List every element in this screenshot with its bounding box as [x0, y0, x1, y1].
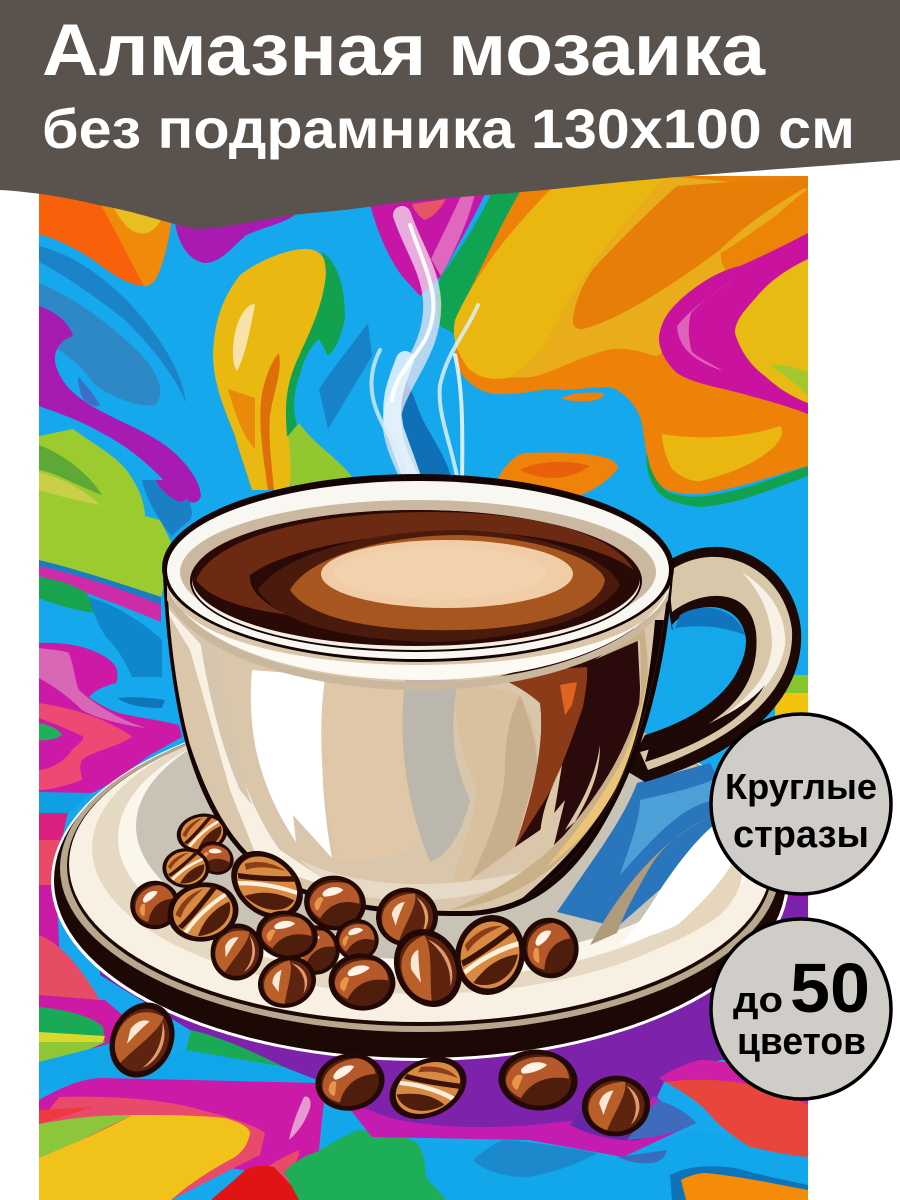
steam	[371, 215, 478, 482]
badge: round rhinestones: стразы	[733, 814, 869, 856]
cup handle	[625, 547, 801, 782]
badge: up to 50 colours: 50	[790, 949, 870, 1027]
title line 2: без подрамника 130х100 см	[42, 97, 855, 160]
cup rim and coffee	[162, 474, 674, 690]
title line 1: Алмазная мозаика	[42, 10, 767, 91]
loose coffee beans	[110, 1002, 650, 1136]
background swirls	[39, 176, 808, 1200]
badge: round rhinestones	[711, 714, 891, 894]
saucer	[51, 732, 788, 1061]
header banner	[0, 0, 900, 229]
purple field around the saucer base	[100, 900, 808, 1097]
badge: round rhinestones: Круглые	[725, 766, 877, 807]
badge: up to 50 colours: цветов	[737, 1021, 866, 1063]
artwork: coffee cup on colourful background	[39, 176, 808, 1200]
badge: up to 50 colours	[711, 919, 891, 1099]
coffee beans on the saucer	[126, 810, 585, 1018]
badge: up to 50 colours: до	[733, 979, 783, 1020]
cup body	[160, 560, 680, 920]
